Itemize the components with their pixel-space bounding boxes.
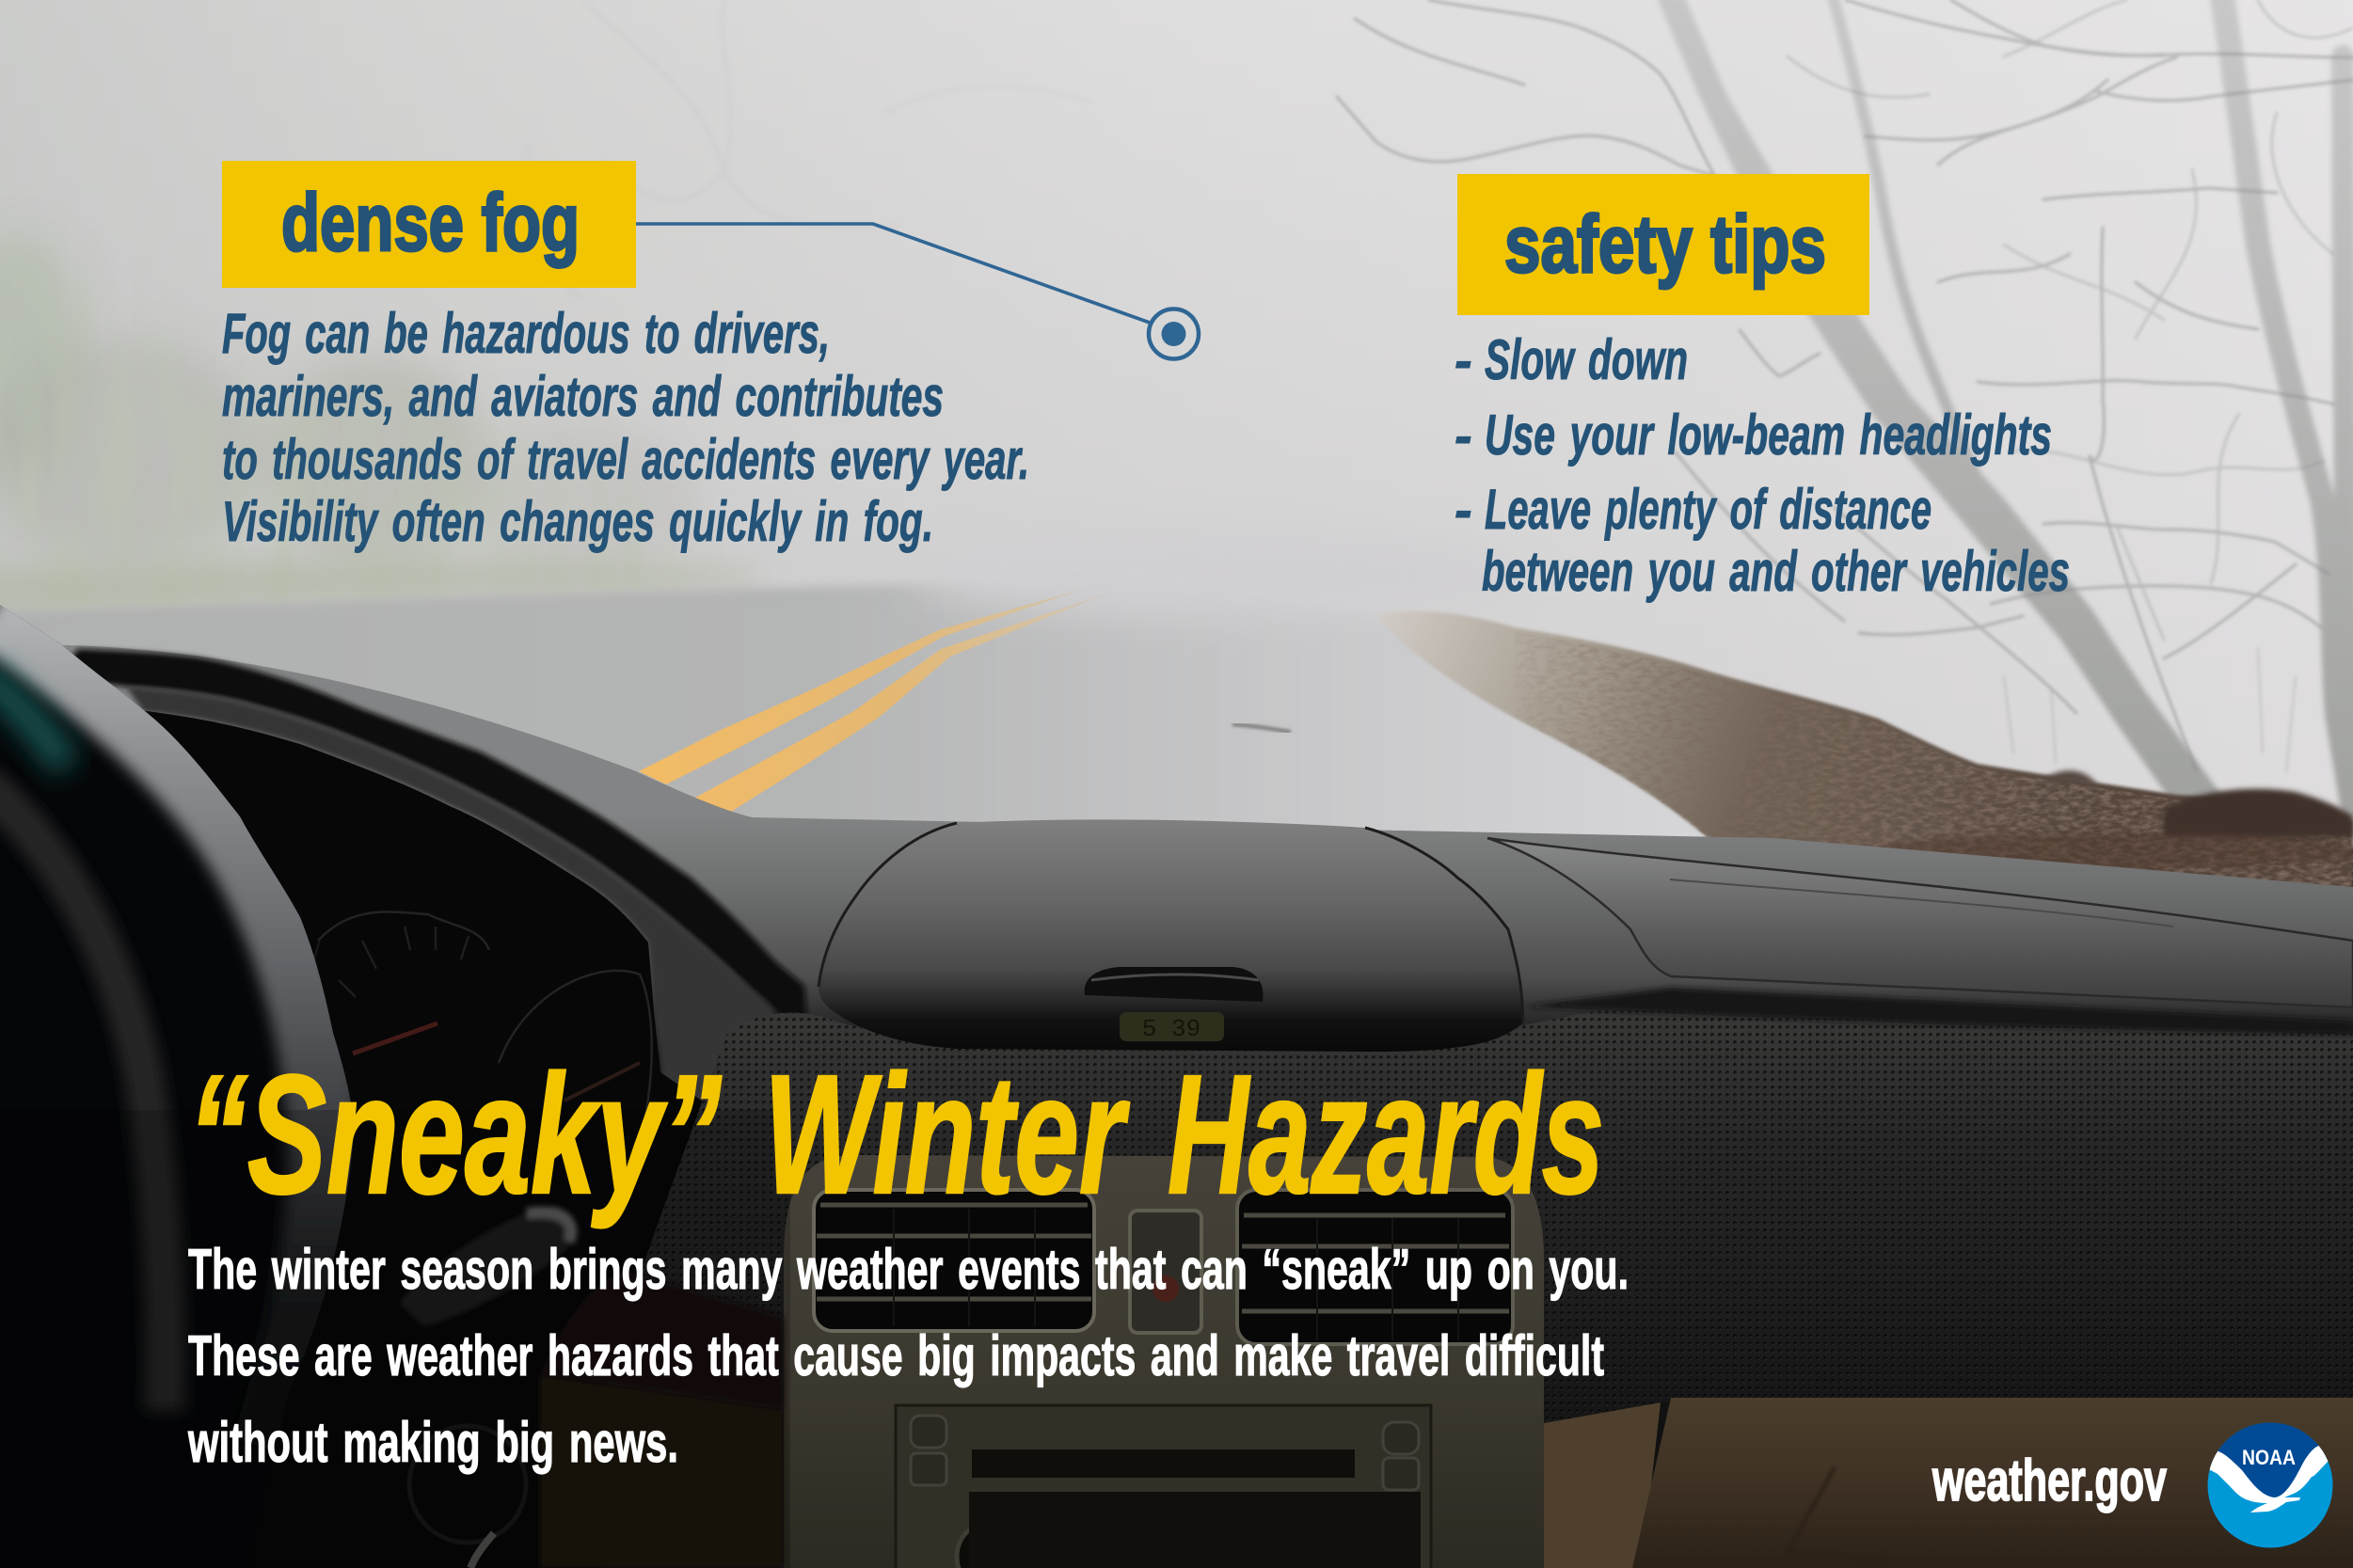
instrument hood inner lip — [126, 687, 774, 1223]
road surface — [0, 579, 1778, 842]
dashboard top surface — [0, 645, 2353, 1053]
heading text: safety tips: safety tips — [1504, 199, 1826, 290]
title — [188, 1040, 1604, 1229]
dirt mound on the right — [1872, 770, 2353, 870]
fog sky — [0, 0, 2353, 847]
website label: weather.gov — [1932, 1449, 2167, 1513]
ignition — [409, 1426, 526, 1568]
dense fog description — [222, 302, 1029, 553]
faint distant trees — [527, 0, 1091, 301]
safety tips list: - — [1455, 480, 1472, 539]
steering wheel — [0, 602, 362, 1568]
background photo: foggy road seen from a car — [0, 0, 2353, 903]
dense fog description: to thousands of travel accidents every year. — [222, 428, 1029, 491]
right side trees — [1337, 0, 2353, 809]
icon: NOAA logo: NOAA — [2242, 1446, 2296, 1469]
heading box: dense fog — [222, 161, 636, 288]
dirt shoulder — [1380, 611, 2353, 903]
wheel rim highlight — [0, 611, 325, 1449]
intro text block: These are weather hazards that cause big impacts and make travel difficult — [188, 1324, 1604, 1387]
hazard button — [1130, 1211, 1201, 1333]
wheel teal reflection — [0, 673, 66, 767]
double yellow centre line — [639, 589, 1109, 816]
intro text block — [187, 1238, 1629, 1474]
safety tips list: - — [1455, 405, 1472, 465]
center console — [784, 1155, 1544, 1568]
right air vent — [1237, 1190, 1513, 1344]
instrument gauges — [9, 911, 652, 1157]
steering column and dark left interior — [0, 1025, 207, 1568]
left fog vegetation — [0, 226, 696, 630]
passenger airbag panel — [1487, 838, 2353, 1007]
shadow under dash top — [1524, 988, 2353, 1035]
horizon fog over road — [913, 532, 1515, 619]
heading text: dense fog: dense fog — [281, 178, 580, 268]
safety tips list: Use your low-beam headlights — [1485, 404, 2052, 467]
dense fog description: mariners, and aviators and contributes — [222, 365, 944, 428]
thin branches — [1337, 0, 2353, 771]
car radio — [896, 1405, 1431, 1568]
car dashboard — [0, 602, 2353, 1568]
safety tips list: - — [1455, 330, 1472, 389]
safety tips list: Leave plenty of distance — [1485, 478, 1932, 541]
dashboard clock — [1120, 1012, 1224, 1043]
dense fog description: Visibility often changes quickly in fog. — [222, 490, 933, 553]
safety tips list: between you and other vehicles — [1482, 540, 2070, 603]
left air vent — [814, 1190, 1094, 1331]
title: Winter — [764, 1040, 1130, 1229]
safety tips list: Slow down — [1485, 328, 1688, 391]
instrument cluster interior — [0, 705, 715, 1568]
turn signal stalk — [400, 1206, 576, 1326]
dashboard perforated panel — [602, 1006, 2353, 1425]
icon: NOAA logo — [2207, 1422, 2333, 1548]
roadside grass strip — [0, 561, 753, 616]
perforation texture — [602, 1006, 2353, 1425]
leader line from heading to marker — [636, 224, 1150, 323]
dashboard clock: 5 39 — [1142, 1015, 1200, 1043]
main trunks — [1656, 0, 2353, 809]
panel: safety tips — [1455, 174, 2070, 603]
intro text block: The winter season brings many weather events that can “sneak” up on you. — [188, 1238, 1629, 1301]
title: Hazards — [1168, 1040, 1604, 1229]
dense fog description: Fog can be hazardous to drivers, — [222, 302, 830, 365]
instrument hood dark band — [56, 649, 809, 1044]
heading box: safety tips — [1457, 174, 1869, 315]
glove box style bin lid — [819, 819, 1523, 1052]
marker: target point — [1149, 309, 1199, 359]
tan lower panels — [540, 1273, 2353, 1568]
title: “Sneaky” — [188, 1040, 722, 1229]
safety tips list — [1455, 328, 2070, 603]
intro text block: without making big news. — [187, 1411, 678, 1474]
dashboard bottom darkening — [0, 1110, 790, 1568]
callout: dense fog — [222, 161, 1199, 553]
bin lid handle — [1085, 967, 1264, 1002]
